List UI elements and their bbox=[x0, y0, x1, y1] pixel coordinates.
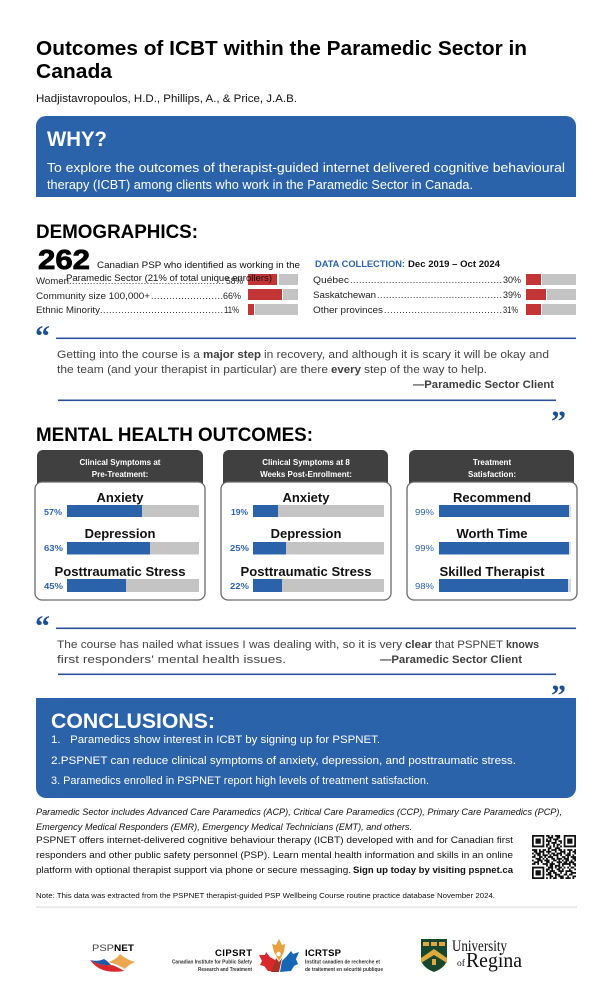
chart: anxiety: 57% bbox=[44, 508, 62, 517]
chart: depression bbox=[44, 526, 199, 554]
demographic bars: left: ......................................... bbox=[100, 305, 223, 315]
QR code bbox=[532, 835, 576, 879]
why text bbox=[47, 160, 565, 192]
logo: ICRTSP bbox=[305, 948, 383, 973]
quote 2: —Paramedic Sector Client bbox=[380, 654, 522, 666]
title bbox=[36, 37, 527, 83]
data collection dates bbox=[315, 259, 500, 269]
panel: pre-treatment symptoms bbox=[35, 450, 205, 600]
quote 2: clear bbox=[405, 639, 433, 651]
definition note: Emergency Medical Responders (EMR), Emergency Medical Technicians (EMT), and others. bbox=[36, 822, 412, 832]
PSPNET description: Sign up today by visiting pspnet.ca bbox=[353, 865, 514, 875]
demographic bars: provinces: Québec bbox=[313, 275, 350, 285]
chart: depression bbox=[230, 526, 384, 554]
conclusions list bbox=[51, 734, 516, 787]
quote 2 bbox=[35, 610, 576, 712]
chart: anxiety bbox=[231, 490, 384, 517]
quote 1: the team (and your therapist in particular) are there bbox=[57, 364, 328, 376]
definition note bbox=[36, 807, 562, 832]
authors: Hadjistavropoulos, H.D., Phillips, A., & Price, J.A.B. bbox=[36, 93, 297, 105]
panel: pre-treatment symptoms: Pre-Treatment: bbox=[92, 470, 148, 479]
panel: why bbox=[36, 116, 576, 197]
quote 1: major step bbox=[203, 349, 261, 361]
demographic bars: provinces: 39% bbox=[503, 290, 521, 300]
chart: worth time: Worth Time bbox=[456, 526, 528, 541]
logo: ICRTSP: ICRTSP bbox=[305, 948, 342, 959]
demographic bars: left: 11% bbox=[224, 305, 239, 315]
demographic bars: provinces: ................................................... bbox=[350, 275, 502, 285]
demographics heading: DEMOGRAPHICS: bbox=[36, 222, 198, 243]
conclusions list: 1. Paramedics show interest in ICBT by signing up for PSPNET. bbox=[51, 734, 380, 746]
panel: post-enrollment symptoms: Weeks Post-Enrollment: bbox=[260, 470, 352, 479]
logo: University of Regina: University bbox=[452, 938, 507, 955]
quote 2: first responders' mental health issues. bbox=[57, 654, 286, 666]
demographic bars: provinces: 31% bbox=[503, 305, 518, 315]
stat: 262 enrollers: Paramedic Sector (21% of total unique enrollers) bbox=[66, 272, 272, 283]
demographic bars: provinces bbox=[313, 274, 576, 315]
quote 2: ” bbox=[551, 679, 566, 712]
chart: worth time bbox=[415, 526, 571, 554]
title: Outcomes of ICBT within the Paramedic Sector in bbox=[36, 37, 527, 60]
logo: PSPNET bbox=[90, 943, 135, 972]
chart: skilled therapist: Skilled Therapist bbox=[440, 564, 545, 579]
demographic bars: left: .................................................... bbox=[69, 276, 224, 286]
chart: anxiety bbox=[44, 490, 199, 517]
demographic bars: left: 66% bbox=[223, 291, 241, 301]
chart: posttraumatic stress bbox=[230, 564, 384, 592]
chart: worth time: 99% bbox=[415, 544, 434, 553]
logo: University of Regina bbox=[421, 938, 523, 972]
conclusions list: 2.PSPNET can reduce clinical symptoms of anxiety, depression, and posttraumatic stress. bbox=[51, 755, 516, 767]
chart: depression: 63% bbox=[44, 544, 63, 553]
panel: treatment satisfaction: Satisfaction: bbox=[468, 470, 516, 479]
logo: CIPSRT: Research and Treatment bbox=[198, 967, 252, 973]
quote 1: “ bbox=[35, 320, 50, 353]
logo: PSPNET: PSP bbox=[92, 943, 114, 954]
stat: 262 enrollers bbox=[38, 244, 300, 283]
icon: maple leaf bbox=[259, 939, 299, 972]
why text: therapy (ICBT) among clients who work in the Paramedic Sector in Canada. bbox=[47, 177, 473, 192]
stat: 262 enrollers: 262 bbox=[38, 244, 90, 275]
PSPNET description bbox=[36, 835, 514, 875]
quote 1: step of the way to help. bbox=[364, 364, 487, 376]
chart: posttraumatic stress: 22% bbox=[230, 582, 249, 591]
chart: posttraumatic stress: Posttraumatic Stress bbox=[54, 564, 186, 579]
chart: anxiety: 19% bbox=[231, 508, 248, 517]
stat: 262 enrollers: Canadian PSP who identified as working in the bbox=[97, 259, 300, 270]
logo: University of Regina: Regina bbox=[466, 948, 523, 972]
chart: skilled therapist bbox=[415, 564, 571, 592]
demographic bars: left: ........................ bbox=[151, 291, 223, 301]
mental health outcomes heading: MENTAL HEALTH OUTCOMES: bbox=[36, 424, 313, 446]
data collection dates: Dec 2019 – Oct 2024 bbox=[408, 259, 500, 269]
logo: CIPSRT: CIPSRT bbox=[215, 948, 252, 959]
demographic bars: left: Ethnic Minority bbox=[36, 305, 101, 315]
chart: anxiety: Anxiety bbox=[283, 490, 330, 505]
quote 1: in recovery, and although it is scary it will be okay and bbox=[264, 349, 549, 361]
chart: recommend bbox=[415, 490, 571, 517]
panel: conclusions bbox=[36, 698, 576, 798]
definition note: Paramedic Sector includes Advanced Care Paramedics (ACP), Critical Care Paramedics (CCP), Primary Care Paramedics (PCP), bbox=[36, 807, 562, 817]
why heading: WHY? bbox=[47, 128, 107, 151]
demographic bars: left: Community size 100,000+ bbox=[36, 291, 150, 301]
data collection dates: DATA COLLECTION: bbox=[315, 259, 405, 269]
panel: post-enrollment symptoms bbox=[221, 450, 391, 600]
quote 2: The course has nailed what issues I was dealing with, so it is very bbox=[57, 639, 403, 651]
quote 2: “ bbox=[35, 610, 50, 643]
why text: To explore the outcomes of therapist-guided internet delivered cognitive behavioural bbox=[47, 160, 565, 175]
demographic bars: left: Women bbox=[36, 276, 69, 286]
chart: posttraumatic stress: 45% bbox=[44, 582, 63, 591]
PSPNET description: responders and other public safety personnel (PSP). Learn mental health information and skills in an online bbox=[36, 850, 513, 860]
demographic bars: provinces: 30% bbox=[503, 275, 521, 285]
chart: anxiety: Anxiety bbox=[97, 490, 144, 505]
demographic bars: provinces: Other provinces bbox=[313, 305, 384, 315]
chart: depression: Depression bbox=[271, 526, 341, 541]
panel: pre-treatment symptoms: Clinical Symptoms at bbox=[80, 458, 161, 467]
demographic bars: provinces: .......................................... bbox=[377, 290, 502, 300]
chart: skilled therapist: 98% bbox=[415, 582, 434, 591]
chart: posttraumatic stress bbox=[44, 564, 199, 592]
title: Canada bbox=[36, 60, 113, 83]
demographic bars: left: 58% bbox=[226, 276, 243, 286]
quote 1: ” bbox=[551, 405, 566, 438]
conclusions list: 3. Paramedics enrolled in PSPNET report high levels of treatment satisfaction. bbox=[51, 775, 429, 787]
chart: depression: 25% bbox=[230, 544, 249, 553]
chart: recommend: 99% bbox=[415, 508, 434, 517]
chart: posttraumatic stress: Posttraumatic Stress bbox=[240, 564, 372, 579]
logo: ICRTSP: de traitement en sécurité publique bbox=[305, 967, 383, 973]
logo: University of Regina: of bbox=[457, 958, 466, 969]
PSPNET description: platform with optional therapist support via phone or secure messaging. bbox=[36, 865, 351, 875]
data source note: Note: This data was extracted from the PSPNET therapist-guided PSP Wellbeing Course routine practice database November 2024. bbox=[36, 891, 495, 900]
quote 1: every bbox=[331, 364, 361, 376]
quote 2: knows bbox=[506, 639, 539, 651]
chart: recommend: Recommend bbox=[453, 490, 531, 505]
panel: treatment satisfaction: Treatment bbox=[473, 458, 511, 467]
logo: CIPSRT: Canadian Institute for Public Safety bbox=[172, 960, 252, 966]
demographic bars: left bbox=[36, 274, 298, 315]
quote 1: —Paramedic Sector Client bbox=[413, 379, 554, 391]
logo: PSPNET: NET bbox=[114, 943, 134, 954]
quote 1 bbox=[35, 320, 576, 438]
panel: treatment satisfaction bbox=[407, 450, 577, 600]
demographic bars: provinces: ....................................... bbox=[384, 305, 502, 315]
chart: depression: Depression bbox=[85, 526, 155, 541]
logo: ICRTSP: Institut canadien de recherche et bbox=[305, 960, 380, 966]
conclusions heading: CONCLUSIONS: bbox=[51, 710, 215, 733]
panel: post-enrollment symptoms: Clinical Symptoms at 8 bbox=[262, 458, 350, 467]
quote 1: Getting into the course is a bbox=[57, 349, 200, 361]
demographic bars: provinces: Saskatchewan bbox=[313, 290, 376, 300]
logo: CIPSRT bbox=[172, 948, 252, 973]
PSPNET description: PSPNET offers internet-delivered cognitive behaviour therapy (ICBT) developed with and for Canadian first bbox=[36, 835, 513, 845]
quote 2: that PSPNET bbox=[435, 639, 503, 651]
